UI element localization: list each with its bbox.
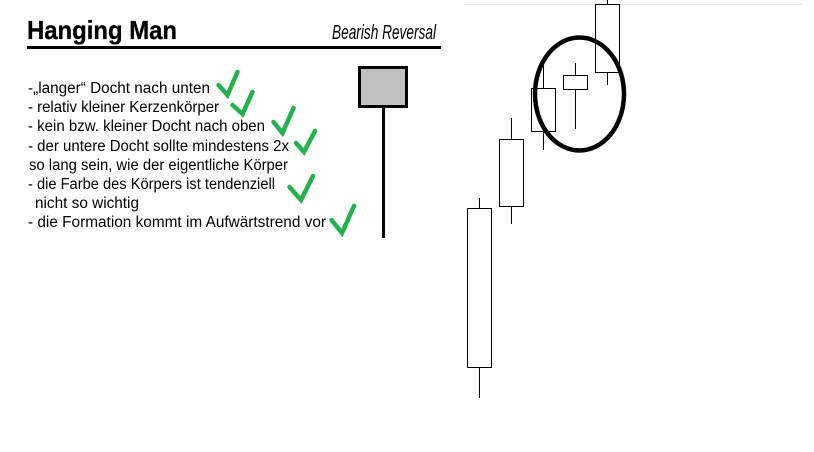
highlight ellipse around hanging man — [535, 38, 624, 150]
candle 2 — [500, 118, 524, 224]
candle 3 — [532, 62, 556, 150]
subtitle: bearish reversal: Bearish Reversal — [332, 22, 436, 44]
criteria text block: - kein bzw. kleiner Docht nach oben — [28, 118, 265, 135]
criteria text block: - die Formation kommt im Aufwärtstrend vor — [28, 214, 326, 231]
hanging man candle diagram — [360, 68, 406, 238]
candlestick chart — [468, 0, 620, 398]
criteria text block: nicht so wichtig — [35, 195, 139, 212]
candle 5 — [596, 0, 620, 85]
candle 4: hanging man — [564, 63, 588, 129]
green check marks — [218, 72, 354, 233]
criteria text block — [28, 80, 326, 231]
criteria text block: - relativ kleiner Kerzenkörper — [28, 99, 219, 116]
criteria text block: so lang sein, wie der eigentliche Körper — [29, 157, 288, 174]
criteria text block: -„langer“ Docht nach unten — [28, 80, 210, 97]
criteria text block: - die Farbe des Körpers ist tendenziell — [28, 176, 275, 193]
criteria text block: - der untere Docht sollte mindestens 2x — [28, 138, 289, 155]
title: Hanging Man — [27, 15, 177, 45]
candle 1 — [468, 198, 492, 398]
